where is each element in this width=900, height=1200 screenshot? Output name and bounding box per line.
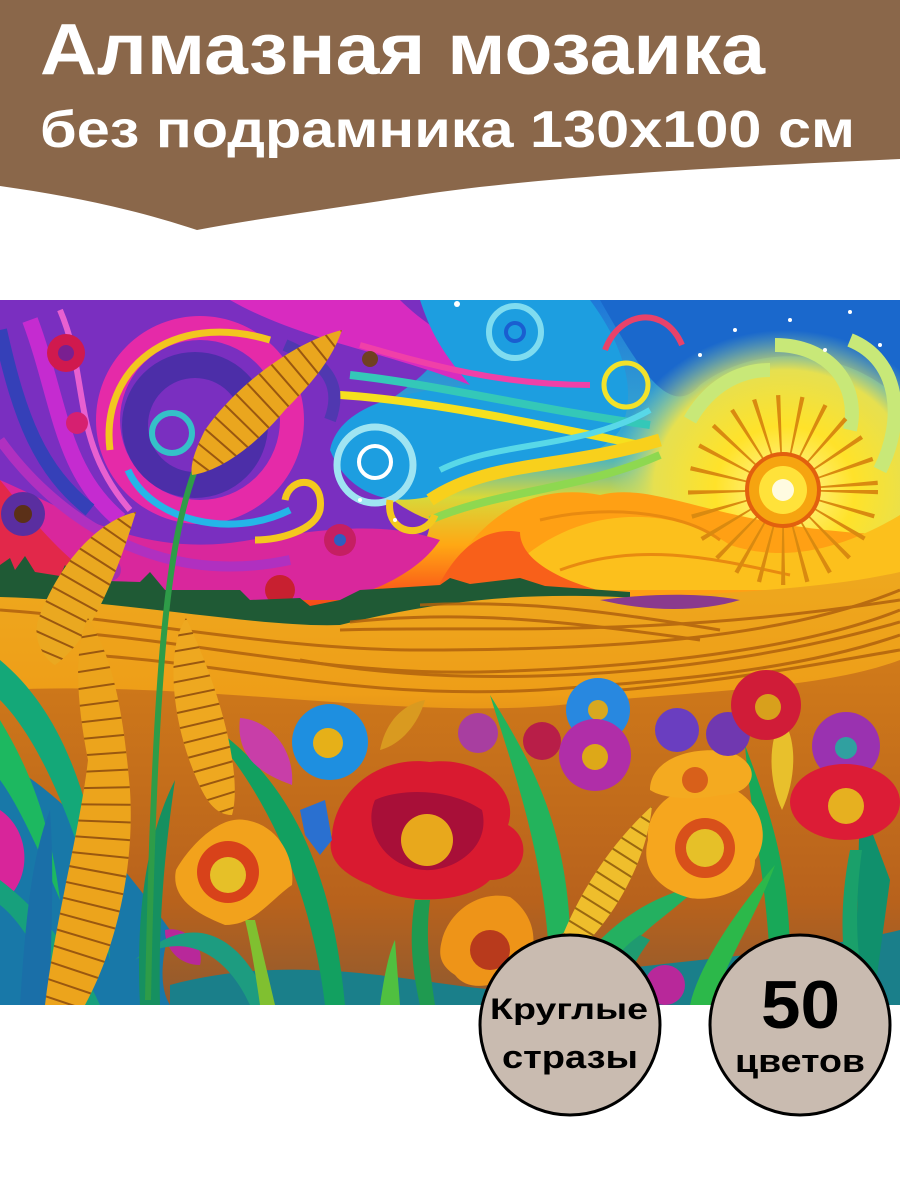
magenta left accents — [0, 810, 24, 892]
blue spirals — [255, 306, 682, 540]
flower: small blue — [300, 800, 332, 855]
purple distant strip — [600, 595, 740, 609]
sun disc — [747, 454, 819, 526]
badge: 50 colours — [710, 935, 890, 1115]
badge: 50 colours: 50 — [761, 967, 840, 1043]
wheat ear: small — [380, 700, 425, 750]
grass blades — [0, 660, 890, 1005]
flower: orange lower middle — [440, 896, 533, 986]
flower: yellow-orange left — [175, 819, 292, 925]
wheat ear: left tall — [45, 618, 131, 1005]
blue swirl mass — [330, 300, 628, 500]
badge: round rhinestones — [480, 935, 660, 1115]
painting: wheat field at sunset — [0, 300, 900, 1005]
orange sun clouds — [470, 492, 864, 597]
sun glow — [614, 332, 900, 534]
tall wheat stem — [148, 470, 195, 1000]
wheat ear: lower right — [562, 806, 652, 937]
sun crescent petals — [690, 340, 895, 470]
sky background — [302, 300, 888, 606]
wheat ear: middle — [173, 618, 235, 815]
distant tree line — [0, 556, 630, 630]
field furrows — [0, 590, 900, 692]
small sky orbs — [1, 334, 378, 605]
badge: round rhinestones: Круглые — [490, 993, 648, 1026]
flower: blue — [292, 704, 368, 780]
golden field — [0, 572, 900, 708]
flower: pink left bud — [239, 718, 292, 785]
subtitle: без подрамника 130x100 см — [40, 101, 855, 159]
blue and teal lower-left base — [0, 760, 170, 1005]
magenta lower accent — [165, 929, 201, 965]
flower: big red poppy — [331, 761, 523, 899]
wheat ear: tall — [192, 330, 342, 475]
teal base strip — [170, 930, 900, 1005]
rainbow ribbons — [340, 345, 660, 520]
badge: round rhinestones: стразы — [502, 1039, 638, 1075]
flower: small purple and blue group — [458, 678, 880, 791]
wheat ear: right — [772, 732, 794, 810]
flower: magenta bottom — [645, 965, 685, 1005]
red lower corner — [0, 480, 71, 576]
flower: yellow upper right — [650, 750, 752, 798]
violet and magenta swirl mass — [0, 300, 430, 545]
lower left pink band — [0, 480, 440, 600]
title: Алмазная мозаика — [40, 10, 766, 90]
sky right deep blue — [600, 300, 900, 400]
lower meadow — [0, 660, 900, 1005]
flower: red far right — [790, 764, 900, 840]
flower: yellow right large — [646, 784, 763, 899]
badge: 50 colours: цветов — [735, 1043, 865, 1079]
wheat ear: left upper — [36, 512, 136, 665]
flower: red right top — [731, 670, 801, 740]
header banner — [0, 0, 900, 230]
sun rays — [717, 424, 849, 556]
big violet spiral — [0, 310, 334, 566]
stars — [358, 301, 882, 522]
magenta top streak — [230, 300, 470, 385]
